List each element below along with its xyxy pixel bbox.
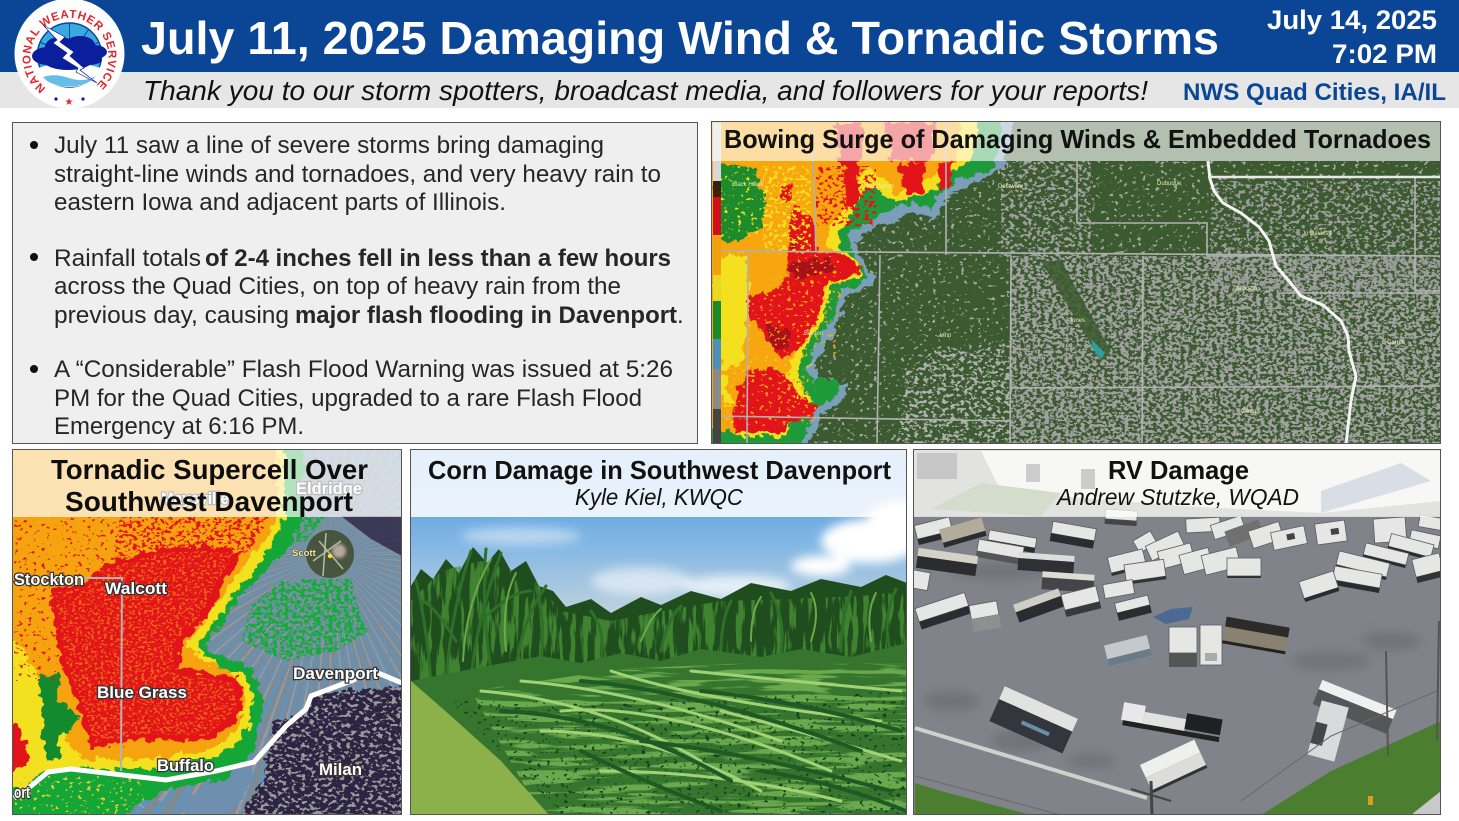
bullet: storm overview: straight-line winds and tornadoes, and very heavy rain to bbox=[54, 161, 661, 188]
road sign bbox=[1368, 796, 1373, 805]
bullet: rainfall totals: previous day, causing bbox=[54, 302, 289, 329]
bullet: flash flood warning: Emergency at 6:16 PM. bbox=[54, 413, 304, 440]
city labels: ort bbox=[14, 783, 30, 802]
date and time stamp: 7:02 PM bbox=[1332, 39, 1437, 69]
pavement stains bbox=[923, 563, 1421, 768]
water puddle bbox=[1153, 607, 1193, 624]
city labels bbox=[14, 479, 378, 802]
reflectivity texture bbox=[721, 166, 876, 426]
bullet: flash flood warning: A “Considerable” Flash Flood Warning was issued at 5:26 bbox=[54, 356, 673, 383]
bullet: flash flood warning: PM for the Quad Cities, upgraded to a rare Flash Flood bbox=[54, 385, 642, 412]
utility poles and fence bbox=[915, 621, 1439, 815]
radar site circle bbox=[306, 530, 354, 578]
panel: regional radar map bbox=[711, 121, 1441, 444]
subtitle strip bbox=[0, 72, 1459, 108]
bullet: storm overview: July 11 saw a line of severe storms bring damaging bbox=[54, 132, 604, 159]
RV heading and credit: Andrew Stutzke, WQAD bbox=[1055, 484, 1299, 510]
clouds bbox=[461, 501, 936, 597]
supercell heading bbox=[51, 454, 368, 517]
corn heading and credit: Kyle Kiel, KWQC bbox=[575, 484, 743, 510]
county labels: Dubuque bbox=[1157, 181, 1182, 187]
city labels: Walcott bbox=[105, 579, 167, 598]
county labels: Black Hawk bbox=[732, 182, 764, 188]
county labels: Jones bbox=[1069, 318, 1085, 324]
legend: radar colour bar bbox=[713, 123, 721, 444]
bullet: storm overview bbox=[30, 132, 661, 216]
bullet: rainfall totals: across the Quad Cities, on top of heavy rain from the bbox=[54, 273, 621, 300]
city labels: Buffalo bbox=[157, 756, 214, 775]
county boundaries bbox=[713, 123, 1441, 444]
RV heading and credit: RV Damage bbox=[1108, 455, 1249, 485]
county labels: Jackson bbox=[1235, 286, 1257, 292]
ground clutter speckle bbox=[801, 161, 1441, 446]
city labels: Blue Grass bbox=[97, 683, 187, 702]
panel: corn damage photo bbox=[410, 449, 907, 815]
background building and lawn bbox=[914, 450, 1442, 516]
velocity-like radial echoes bbox=[13, 374, 510, 816]
bullet: rainfall totals: of 2-4 inches fell in less than a few hours bbox=[205, 245, 671, 272]
supercell heading: Southwest Davenport bbox=[65, 486, 353, 517]
city labels: Davenport bbox=[293, 664, 378, 683]
radar heading: Bowing Surge of Damaging Winds & Embedded Tornadoes bbox=[724, 124, 1431, 154]
bullet: flash flood warning bbox=[30, 356, 673, 440]
county labels: Linn bbox=[940, 333, 951, 339]
office name: NWS Quad Cities, IA/IL bbox=[1183, 79, 1446, 106]
grass and curb bbox=[915, 721, 1441, 815]
parking lot bbox=[914, 450, 1442, 816]
title overlay band bbox=[712, 122, 1442, 161]
title overlay band bbox=[411, 450, 908, 517]
icon: National Weather Service logo: NATIONAL WEATHER SERVICE bbox=[22, 10, 116, 94]
state line river bbox=[1208, 161, 1356, 444]
title: July 11, 2025 Damaging Wind & Tornadic Storms bbox=[141, 12, 1219, 64]
date and time stamp bbox=[1267, 5, 1437, 69]
title overlay band bbox=[13, 450, 403, 517]
title overlay band bbox=[914, 450, 1442, 517]
bullet: rainfall totals: Rainfall totals bbox=[54, 245, 201, 272]
corn heading and credit bbox=[428, 455, 891, 510]
icon: National Weather Service logo bbox=[14, 0, 124, 108]
county labels bbox=[732, 181, 1405, 415]
panel: tornadic supercell radar bbox=[12, 449, 402, 815]
radar site label: Scott bbox=[292, 548, 317, 559]
thank-you message: Thank you to our storm spotters, broadcast media, and followers for your reports! bbox=[143, 75, 1148, 106]
icon: National Weather Service logo: ★ bbox=[65, 97, 74, 108]
county labels: Benton bbox=[804, 331, 823, 337]
county labels: Jo Daviess bbox=[1302, 231, 1331, 237]
parked RVs bbox=[908, 509, 1445, 793]
RV heading and credit bbox=[1055, 455, 1299, 510]
city labels: Maysville bbox=[161, 489, 229, 508]
city labels: Eldridge bbox=[296, 479, 362, 498]
header banner bbox=[0, 0, 1459, 72]
panel: storm summary text bbox=[12, 122, 698, 444]
sky bbox=[411, 450, 908, 625]
supercell heading: Tornadic Supercell Over bbox=[51, 454, 368, 485]
highways and roads bbox=[14, 578, 402, 798]
bullet: storm overview: eastern Iowa and adjacent parts of Illinois. bbox=[54, 189, 506, 216]
standing corn bbox=[411, 547, 907, 701]
bowing storm line reflectivity bbox=[701, 111, 1016, 451]
corn heading and credit: Corn Damage in Southwest Davenport bbox=[428, 455, 891, 485]
panel: RV damage photo bbox=[913, 449, 1441, 815]
flattened corn bbox=[411, 643, 907, 815]
date and time stamp: July 14, 2025 bbox=[1267, 5, 1437, 35]
bullet: rainfall totals: . bbox=[677, 302, 684, 329]
county labels: Clinton bbox=[1241, 409, 1260, 415]
reflectivity speckle bbox=[14, 517, 271, 814]
bullet: rainfall totals bbox=[30, 245, 684, 329]
city labels: Milan bbox=[319, 760, 362, 779]
bullet: rainfall totals: major flash flooding in Davenport bbox=[295, 302, 677, 329]
supercell reflectivity bbox=[1, 441, 306, 821]
city labels: Stockton bbox=[14, 570, 84, 589]
county labels: Buchanan bbox=[867, 184, 894, 190]
county labels: Carroll bbox=[1387, 340, 1405, 346]
grass foreground bbox=[411, 681, 549, 815]
county labels: Delaware bbox=[998, 184, 1024, 190]
